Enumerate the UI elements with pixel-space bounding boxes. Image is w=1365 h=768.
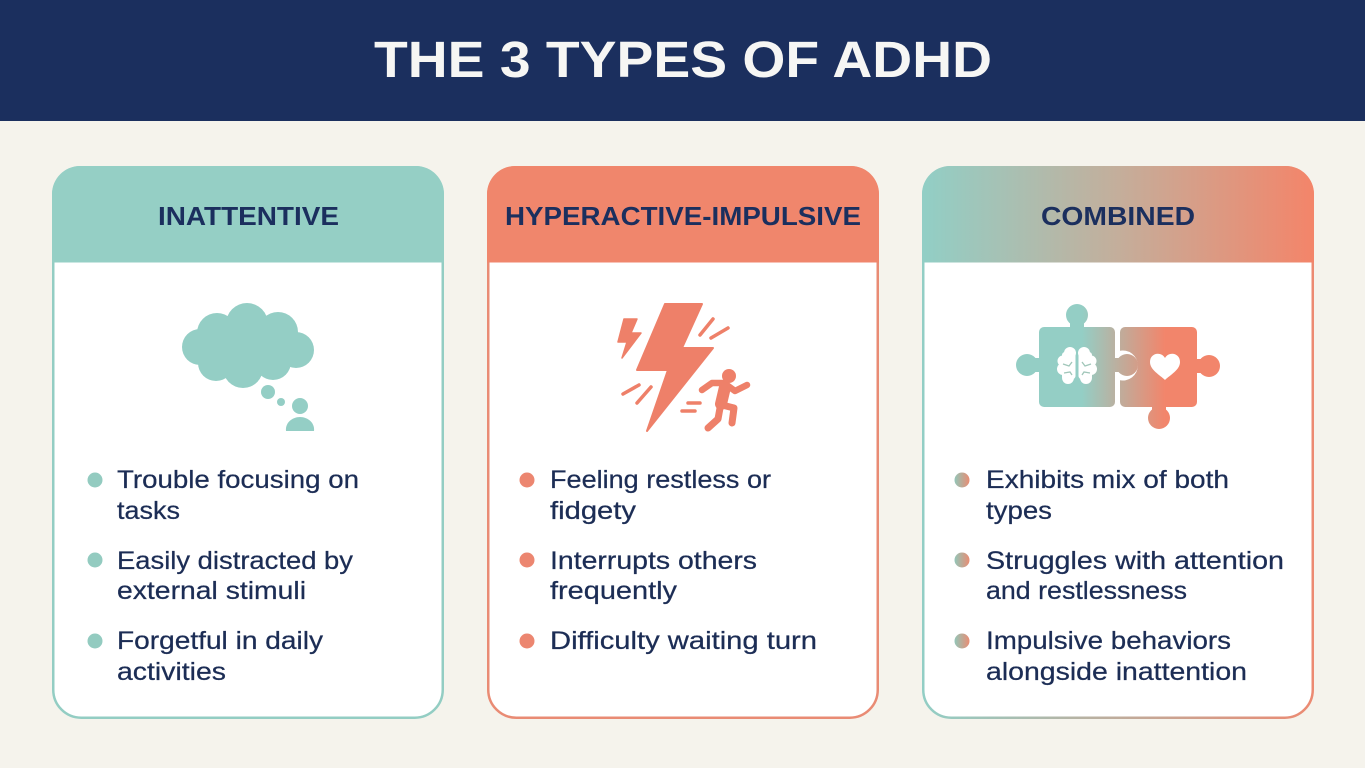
bullet list: inattentive: Trouble focusing on (117, 466, 359, 494)
panel: hyperactive-impulsive (487, 166, 879, 718)
header: hyperactive-impulsive: HYPERACTIVE-IMPULSIVE (505, 201, 861, 231)
header: inattentive: INATTENTIVE (158, 201, 339, 231)
icon: thought cloud with person (182, 303, 314, 431)
bullet list: hyperactive-impulsive: frequently (550, 577, 678, 605)
panel: inattentive (52, 166, 444, 718)
header: hyperactive-impulsive (487, 166, 879, 262)
bullet list: combined: Struggles with attention (986, 547, 1284, 575)
bullet list: inattentive (88, 466, 359, 686)
bullet list: hyperactive-impulsive: Feeling restless or (550, 466, 771, 494)
icon: heart (1150, 354, 1180, 380)
bullet list: hyperactive-impulsive: Difficulty waiting turn (550, 627, 817, 655)
bullet list: combined: types (986, 497, 1052, 525)
bullet list: combined: alongside inattention (986, 658, 1247, 686)
header: combined (922, 166, 1314, 262)
bullet list: hyperactive-impulsive: fidgety (550, 497, 637, 525)
bullet list: inattentive: external stimuli (117, 577, 306, 605)
icon: lightning bolts and running figure (618, 304, 747, 431)
bullet list: inattentive: Easily distracted by (117, 547, 354, 575)
icon: brain (1057, 347, 1097, 384)
title banner (0, 0, 1365, 121)
panel: combined (922, 166, 1314, 718)
bullet list: combined: Exhibits mix of both (986, 466, 1229, 494)
icon: puzzle pieces with brain and heart (1016, 304, 1220, 429)
header: combined: COMBINED (1041, 201, 1195, 231)
title: THE 3 TYPES OF ADHD (374, 31, 992, 88)
header: inattentive (52, 166, 444, 262)
bullet list: inattentive: tasks (117, 497, 180, 525)
bullet list: inattentive: activities (117, 658, 226, 686)
bullet list: combined: and restlessness (986, 577, 1187, 605)
bullet list: hyperactive-impulsive: Interrupts others (550, 547, 757, 575)
bullet list: combined (954, 466, 1284, 686)
bullet list: hyperactive-impulsive (520, 466, 817, 655)
bullet list: inattentive: Forgetful in daily (117, 627, 324, 655)
bullet list: combined: Impulsive behaviors (986, 627, 1231, 655)
